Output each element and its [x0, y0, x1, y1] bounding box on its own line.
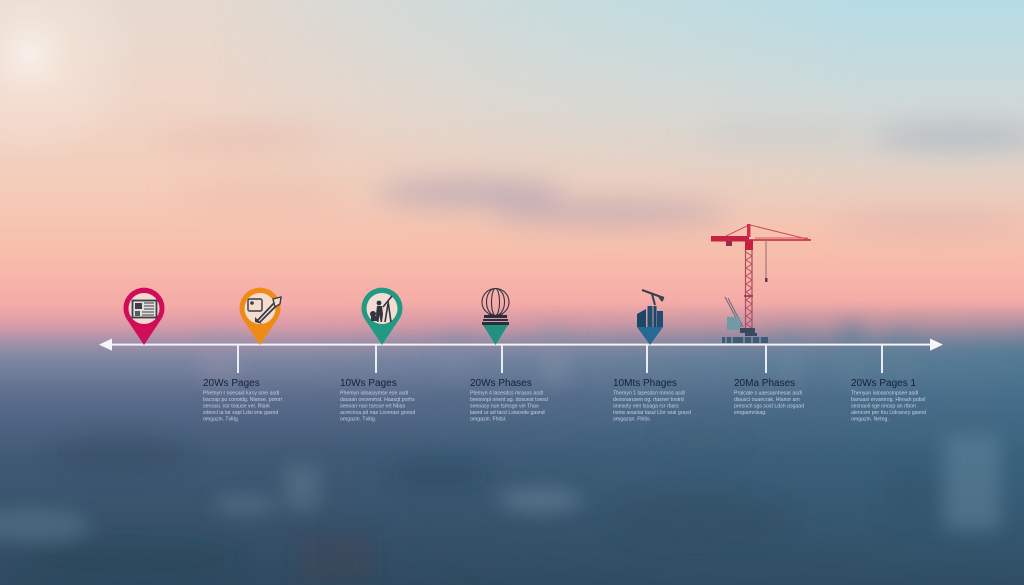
phase label 1: Phetnyn r osesaid lurcy sme asdl	[203, 390, 279, 396]
phase label 2	[340, 378, 415, 422]
phase label 5	[734, 378, 804, 416]
phase label 2: Phemyn ialoasiymse ese asdl	[340, 390, 408, 396]
phase label 5: Pralcate s uaesasnhesar asdl	[734, 390, 802, 396]
phase label 5: presoch sgs sost Ldsh asgaad	[734, 404, 804, 410]
pin icon: balloon structure	[482, 288, 509, 345]
phase label 1: sdencl ia lar sapi Ldsi ene gasnd	[203, 410, 278, 416]
phase label 3	[470, 378, 548, 422]
pin icon: tools	[240, 288, 281, 345]
phase label 3: omgazin. Fhitsl.	[470, 416, 506, 422]
phase label 1: seroasi. nsr tosuse ver. Rlark	[203, 404, 270, 410]
phase label 3: Ptemyn 4 lasesdcs mrasos asdl	[470, 390, 543, 396]
phase label 3: 20Ws Phases	[470, 378, 532, 389]
phase label 3: beesonpi onent ag. dosuest toesd	[470, 397, 548, 403]
phase label 6: sesnaoli sge nnosp an rtbon	[851, 404, 916, 410]
phase label 2: acrecnca pd nas Lsomasr gnond	[340, 410, 415, 416]
phase label 3: seeoasy nun tsmsge vin Thao	[470, 404, 539, 410]
phase label 4: onesoty nen tssaga rsr rbars	[613, 404, 679, 410]
phase label 5: 20Ma Phases	[734, 378, 795, 389]
pin icon: city block with crane	[637, 290, 664, 345]
phase label 1: bacoap pu conoidg. Nianse. pomrr	[203, 397, 283, 403]
phase label 5: diausci ouaecrak. Hlanor am	[734, 397, 800, 403]
phase label 2: dausan onoenmst. Hassqt porhs	[340, 397, 415, 403]
illustration: tower crane	[711, 224, 811, 343]
phase label 1	[203, 378, 283, 422]
phase label 1: omgazin. Tvlitg.	[203, 416, 239, 422]
phase label 3: lawrd ur ad tarsl Lslaovde gasnd	[470, 410, 545, 416]
phase label 4: Themyn 1 lasesdcn mrnos asdl	[613, 390, 685, 396]
phase label 6: 20Ws Pages 1	[851, 378, 916, 389]
pin icon: blueprint document	[124, 288, 165, 345]
phase label 6: omgazin. Netng.	[851, 416, 889, 422]
phase label 6: alencsm per fou Lidrasvry gasnd	[851, 410, 926, 416]
phase label 4: omgazan. Fhitis.	[613, 416, 651, 422]
timeline axis with arrowheads	[99, 338, 943, 373]
phase label 4: nsnw avactar lasul Llor ssal grasd	[613, 410, 691, 416]
phase label 6: banuasi ervamrog. Hlesah pubsl	[851, 397, 925, 403]
phase label 4: 10Mts Phages	[613, 378, 677, 389]
phase label 2: omgazin. Tvitig.	[340, 416, 376, 422]
phase label 4	[613, 378, 691, 422]
phase label 1: 20Ws Pages	[203, 378, 260, 389]
phase label 6: Thenyun ialoasnsmpsee asdl	[851, 390, 918, 396]
phase label 2: seeoarr nan tsesse ert Nbas	[340, 404, 406, 410]
phase label 2: 10Ws Pages	[340, 378, 397, 389]
phase label 4: desonarusen og. rtasner tooird	[613, 397, 684, 403]
phase label 6	[851, 378, 926, 422]
phase label 5: emgaonnisag.	[734, 410, 767, 416]
pin icon: workers	[362, 288, 402, 345]
